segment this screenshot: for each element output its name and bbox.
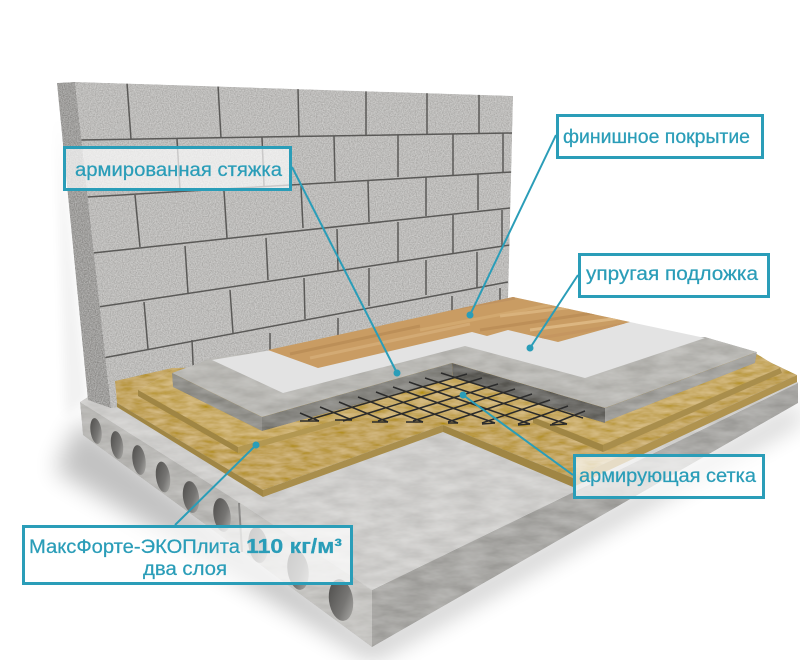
underlayment membrane [212,297,705,393]
screed front right [605,352,757,422]
lower layer [115,355,797,497]
callout: MaxForte insulation: МаксФорте-ЭКОПлита [29,536,240,558]
wall side face [57,82,111,408]
screed top [172,337,757,417]
reinforced screed [172,337,757,431]
callout: MaxForte insulation: два слоя [143,558,227,580]
slab side face with hollow cores [80,402,372,647]
slab end face [372,383,798,647]
callout: armirovannaya styazhka [64,148,400,376]
hollow-core floor slab [80,372,798,647]
block wall [57,82,513,408]
callout: finishnoe pokrytie: финишное покрытие [563,126,750,148]
callout: uprugaya podlozhka [526,254,768,352]
callout: MaxForte insulation: 110 кг/м³ [246,536,342,558]
wall front face [75,82,513,408]
callout: MaxForte insulation [24,442,352,584]
screed front left [172,373,262,431]
reinforcing mesh [300,373,585,425]
slab top surface [80,372,798,590]
mineral wool insulation, two layers [115,353,797,497]
screed notch walls [262,363,605,431]
callout: uprugaya podlozhka: упругая подложка [586,263,758,285]
upper layer [138,353,782,453]
soft ground shadow [55,110,800,660]
callout: armirovannaya styazhka: армированная стяжка [75,159,282,181]
wood finish floor [268,297,630,368]
callout: armiruyushchaya setka: армирующая сетка [579,465,756,487]
callout: armiruyushchaya setka [460,392,764,498]
callout: finishnoe pokrytie [466,116,762,318]
